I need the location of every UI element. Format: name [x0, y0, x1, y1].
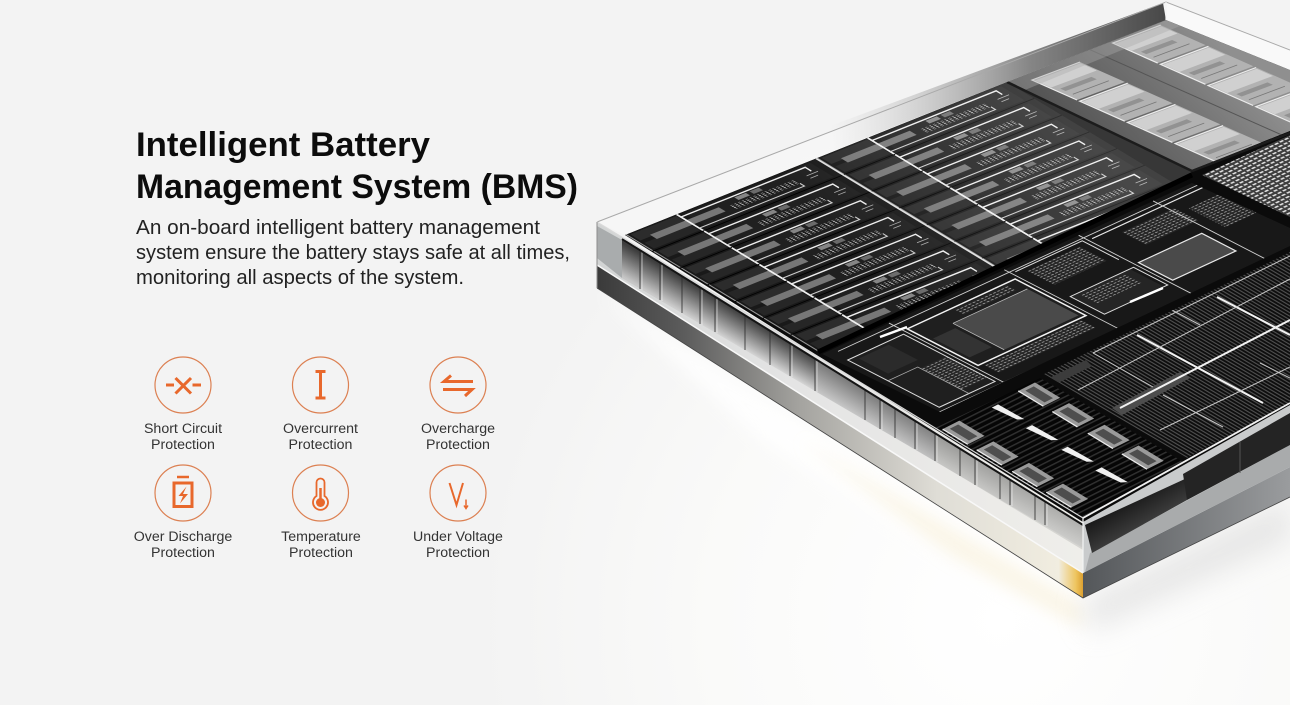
base plate: [597, 265, 1290, 598]
feature: over discharge protection: [134, 465, 232, 561]
white grid lines: [1120, 297, 1290, 408]
description text: An on-board intelligent battery management: [136, 217, 540, 239]
feature: overcharge protection: Overcharge: [421, 421, 495, 437]
light glass-covered circuit block: [1009, 20, 1290, 170]
upper right panel: [1092, 187, 1256, 281]
feature: temperature protection: [281, 465, 361, 561]
feature: under voltage protection: Under Voltage: [413, 529, 503, 545]
feature: overcharge protection: Protection: [426, 437, 490, 453]
feature: short circuit protection: [144, 357, 222, 453]
top circuit block: [625, 82, 1200, 352]
grey crossbars: [1050, 360, 1092, 382]
cell side wall: left face: [622, 239, 1083, 550]
mesh textured block: [1202, 135, 1290, 217]
lower right ribbed grid block: [1044, 252, 1290, 458]
white contact spikes: [992, 404, 1128, 486]
feature: over discharge protection: Over Discharge: [134, 529, 232, 545]
description text: [136, 217, 570, 289]
module rows: [625, 82, 1200, 352]
glass top cover: [597, 2, 1290, 573]
feature: overcurrent protection: Overcurrent: [283, 421, 358, 437]
feature: under voltage protection: Protection: [426, 545, 490, 561]
description text: system ensure the battery stays safe at all times,: [136, 242, 570, 264]
middle pads: [1015, 241, 1168, 316]
description text: monitoring all aspects of the system.: [136, 267, 464, 289]
feature: temperature protection: Temperature: [281, 529, 361, 545]
large grey panel one: [907, 279, 1103, 374]
protection features grid: [134, 357, 503, 561]
feature: temperature protection: Protection: [289, 545, 353, 561]
feature: overcurrent protection: Protection: [289, 437, 352, 453]
cell side wall: right face: [1085, 413, 1290, 572]
heading: Intelligent Battery: [136, 126, 430, 164]
heading: [136, 126, 578, 206]
surface reflection and shadow: [600, 292, 1290, 645]
feature: under voltage protection: [413, 465, 503, 561]
top surface base: [625, 20, 1290, 522]
dark panel with pads left: [848, 334, 995, 407]
front corner block with chips: [935, 375, 1188, 518]
battery pack illustration: [597, 0, 1290, 645]
heading: Management System (BMS): [136, 168, 578, 206]
feature: overcharge protection: [421, 357, 495, 453]
seam between light block and mesh: [1007, 82, 1290, 171]
feature: over discharge protection: Protection: [151, 545, 215, 561]
seam between top and middle blocks: [818, 175, 1192, 352]
middle circuit block: [823, 183, 1290, 412]
feature: overcurrent protection: [283, 357, 358, 453]
glass mid layer: [597, 222, 1290, 573]
feature: short circuit protection: Short Circuit: [144, 421, 222, 437]
feature: short circuit protection: Protection: [151, 437, 215, 453]
